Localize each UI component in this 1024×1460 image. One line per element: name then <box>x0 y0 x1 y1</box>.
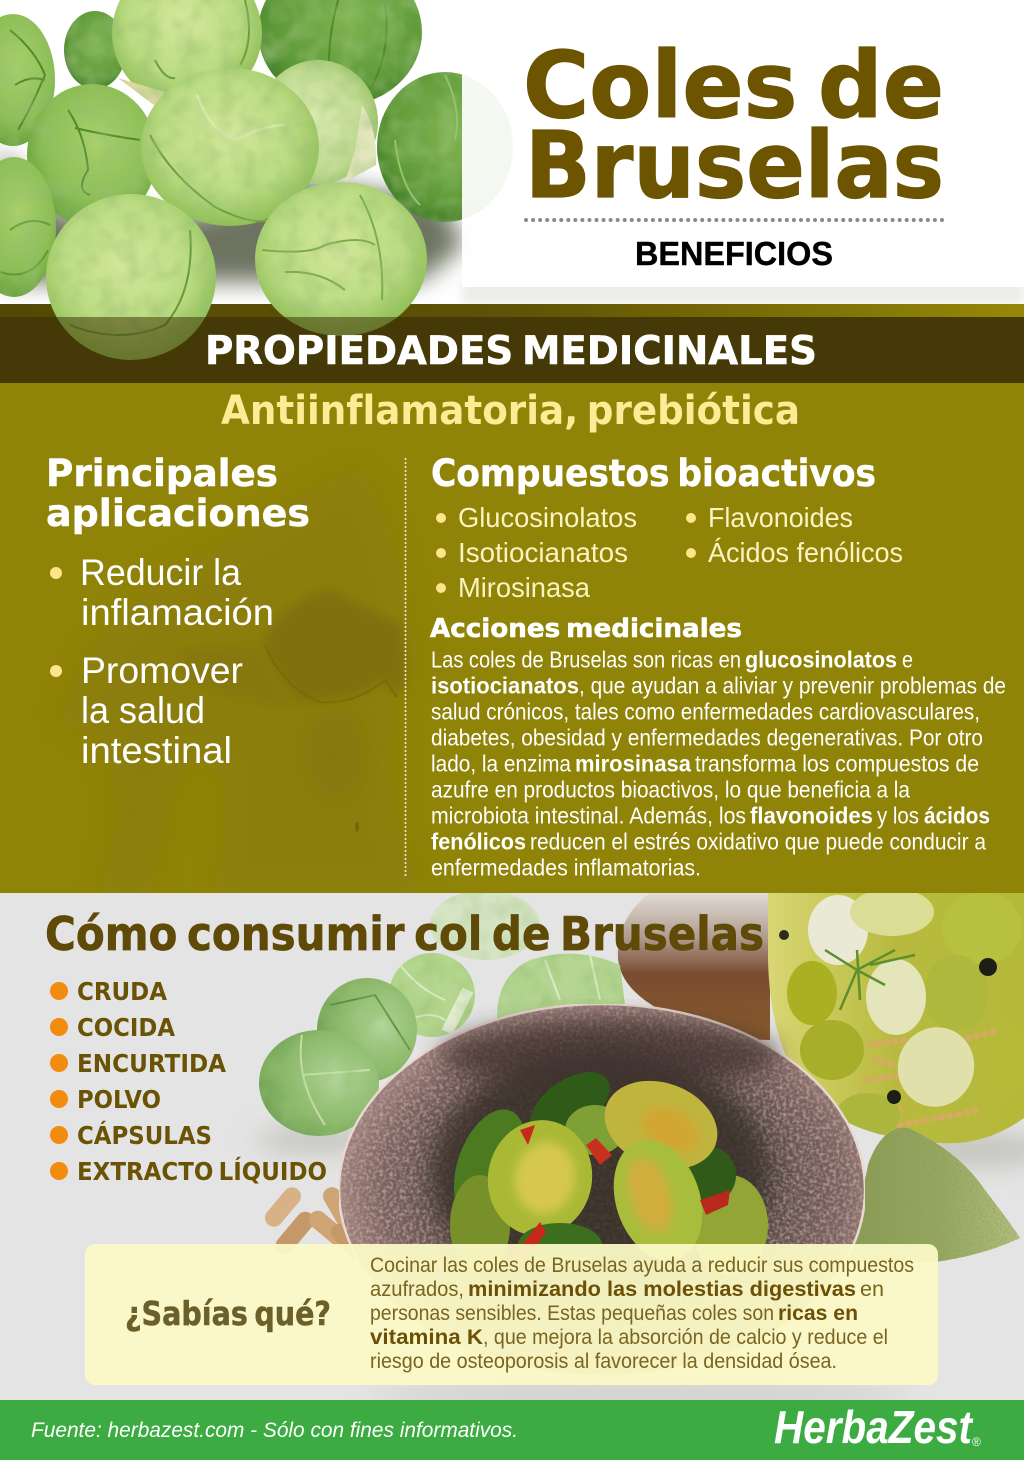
bullet: reduce inflammation <box>50 552 274 633</box>
callout text: en <box>860 1277 884 1301</box>
callout text: ricas en <box>778 1301 858 1325</box>
image: capsules <box>265 1187 349 1244</box>
heading: Acciones medicinales: Acciones medicinales <box>430 614 742 644</box>
image: pile of brussels sprouts <box>0 0 513 360</box>
text: medicinal actions paragraph: microbiota intestinal. Además, los <box>431 802 746 828</box>
image: roasted sprouts <box>450 1072 768 1244</box>
callout text <box>370 1253 914 1373</box>
callout text: riesgo de osteoporosis al favorecer la densidad ósea. <box>370 1349 837 1373</box>
text: medicinal actions paragraph: azufre en productos bioactivos, lo que beneficia a la <box>431 776 910 802</box>
image: bowl with roasted sprouts <box>339 1001 865 1318</box>
list: forms of consumption: CÁPSULAS <box>77 1121 212 1150</box>
list of compounds <box>436 502 903 603</box>
callout text: azufrados, <box>370 1277 464 1301</box>
text: medicinal actions paragraph: salud crónicos, tales como enfermedades cardiovasculares, <box>431 698 980 724</box>
callout background <box>85 1244 938 1385</box>
background image: faded torso silhouette <box>180 588 408 832</box>
bullet: reduce inflammation: inflamación <box>81 592 274 633</box>
image: raw sprouts <box>259 890 625 1136</box>
title: Coles de Bruselas: Bruselas <box>525 112 944 219</box>
footer bar <box>0 1400 1024 1460</box>
heading: how to consume: Cómo consumir col de Bruselas <box>45 907 764 961</box>
panel: principal applications <box>46 452 310 771</box>
text: medicinal actions paragraph: e <box>902 646 913 672</box>
list: forms of consumption: COCIDA <box>77 1013 176 1042</box>
bullet: promote gut health <box>50 650 243 771</box>
source note: Fuente: herbazest.com - Sólo con fines informativos. <box>31 1419 518 1442</box>
bullet: reduce inflammation: Reducir la <box>80 552 241 593</box>
image: amber bottle <box>618 893 770 1040</box>
shadow under sprouts <box>0 150 1024 304</box>
list: forms of consumption: EXTRACTO LÍQUIDO <box>77 1157 327 1186</box>
text: medicinal actions paragraph: y los <box>877 802 919 828</box>
footer <box>0 1400 1024 1460</box>
bullet: promote gut health: Promover <box>81 650 243 691</box>
callout text: Cocinar las coles de Bruselas ayuda a reducir sus compuestos <box>370 1253 914 1277</box>
logo: HerbaZest: ® <box>972 1435 981 1449</box>
text: medicinal actions paragraph: mirosinasa <box>575 750 691 776</box>
title: Coles de Bruselas <box>523 32 944 219</box>
text: medicinal actions paragraph: glucosinolatos <box>745 646 897 672</box>
heading: Principales aplicaciones: Principales <box>46 452 278 495</box>
subheading: Antiinflamatoria, prebiótica: Antiinflamatoria, prebiótica <box>221 388 800 434</box>
list of compounds: Ácidos fenólicos <box>708 537 903 568</box>
section background: how to consume <box>0 893 1024 1400</box>
list of compounds: Flavonoides <box>708 502 853 533</box>
logo: HerbaZest: HerbaZest <box>774 1401 973 1453</box>
title panel <box>462 0 1024 287</box>
callout text: vitamina K <box>370 1325 483 1349</box>
dotted divider <box>526 218 942 222</box>
bullet: promote gut health: intestinal <box>81 730 232 771</box>
list: forms of consumption: CRUDA <box>77 977 168 1006</box>
title: Coles de Bruselas: Coles de <box>523 32 944 139</box>
heading: Principales aplicaciones <box>46 452 310 535</box>
text: medicinal actions paragraph: flavonoides <box>750 802 873 828</box>
header band: olive strip <box>0 304 1024 317</box>
olive medicinal panel background <box>0 383 1024 893</box>
callout text: personas sensibles. Estas pequeñas coles son <box>370 1301 774 1325</box>
list of compounds: Glucosinolatos <box>458 502 637 533</box>
list of compounds: Mirosinasa <box>458 572 590 603</box>
text: medicinal actions paragraph <box>431 646 1006 880</box>
list of compounds: Isotiocianatos <box>458 537 628 568</box>
text: medicinal actions paragraph: ácidos <box>924 802 990 828</box>
text: medicinal actions paragraph: diabetes, obesidad y enfermedades degenerativas. Por otro <box>431 724 983 750</box>
bullet: promote gut health: la salud <box>81 690 205 731</box>
photo collage: sprouts, bottle, jar, bowl, powder, capsules <box>255 888 1024 1409</box>
list: forms of consumption: POLVO <box>77 1085 161 1114</box>
list: forms of consumption: ENCURTIDA <box>77 1049 227 1078</box>
text: medicinal actions paragraph: reducen el estrés oxidativo que puede conducir a <box>530 828 986 854</box>
text: medicinal actions paragraph: isotiocianatos <box>431 672 579 698</box>
text: medicinal actions paragraph: enfermedades inflamatorias. <box>431 854 701 880</box>
callout text: , que mejora la absorción de calcio y reduce el <box>483 1325 888 1349</box>
panel: bioactive compounds <box>430 452 1006 880</box>
header band: dark strip <box>0 317 1024 383</box>
heading: Principales aplicaciones: aplicaciones <box>46 492 310 535</box>
callout: did you know <box>85 1244 938 1385</box>
image: pickled sprouts jar <box>768 888 1024 1148</box>
list: forms of consumption <box>50 977 327 1186</box>
heading: Propiedades medicinales: PROPIEDADES MEDICINALES <box>205 329 817 374</box>
text: medicinal actions paragraph: fenólicos <box>431 828 526 854</box>
text: medicinal actions paragraph: Las coles de Bruselas son ricas en <box>431 646 741 672</box>
image: green powder mound <box>855 1128 1020 1262</box>
band tint over sprouts <box>0 317 1024 383</box>
text: medicinal actions paragraph: lado, la enzima <box>431 750 571 776</box>
text: medicinal actions paragraph: transforma los compuestos de <box>695 750 979 776</box>
image: soft floor shadows <box>255 1126 1024 1409</box>
callout heading: ¿Sabías qué? <box>125 1294 331 1333</box>
subtitle: Beneficios: BENEFICIOS <box>635 235 833 272</box>
callout text: minimizando las molestias digestivas <box>468 1277 856 1301</box>
translucent panel background <box>462 0 1024 287</box>
heading: Compuestos bioactivos: Compuestos bioactivos <box>431 452 876 495</box>
